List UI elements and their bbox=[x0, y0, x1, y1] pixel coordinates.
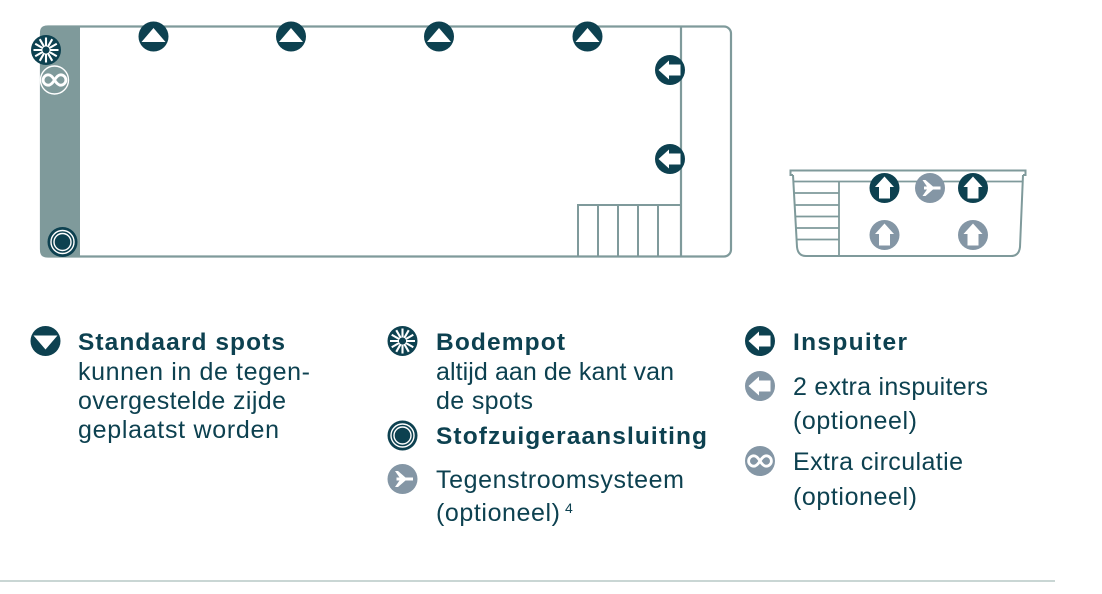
icon: inspuiter bbox=[745, 326, 775, 356]
text: bodempot description: de spots bbox=[436, 387, 533, 415]
right deck divider bbox=[680, 26, 682, 257]
pool cross-section bbox=[790, 170, 1026, 256]
text: extra circulatie: Extra circulatie bbox=[793, 448, 963, 476]
pool top view bbox=[31, 22, 731, 258]
icon: bodempot bbox=[388, 326, 418, 356]
legend: standaard spots bbox=[30, 326, 310, 444]
text: extra circulatie bbox=[793, 448, 963, 511]
text: tegenstroomsysteem: 4 bbox=[565, 500, 573, 516]
text: standaard spots description bbox=[78, 358, 310, 444]
icon: spot 3 bbox=[424, 22, 454, 52]
icon: inspuiter left bbox=[870, 173, 900, 203]
icon: stofzuigeraansluiting bbox=[48, 227, 78, 257]
icon: inspuiter 2 bbox=[655, 144, 685, 174]
text: bodempot description bbox=[436, 358, 674, 415]
icon: extra circulatie bbox=[745, 446, 775, 476]
heading: standaard spots: Standaard spots bbox=[78, 329, 285, 356]
text: bodempot description: altijd aan de kant van bbox=[436, 358, 674, 386]
icon: tegenstroomsysteem bbox=[388, 464, 418, 494]
icon: spot 2 bbox=[276, 22, 306, 52]
icon: extra circulatie bbox=[40, 66, 68, 94]
icon: standaard spot bbox=[30, 326, 60, 356]
icon: extra inspuiter right bbox=[958, 220, 988, 250]
legend: middle column bbox=[388, 326, 707, 527]
text: standaard spots description: geplaatst worden bbox=[78, 416, 279, 444]
basin outline bbox=[793, 175, 1023, 256]
side stairs bbox=[794, 181, 839, 256]
text: extra circulatie: (optioneel) bbox=[793, 483, 917, 511]
text: tegenstroomsysteem bbox=[436, 466, 684, 527]
text: standaard spots description: overgestelde zijde bbox=[78, 387, 286, 415]
heading: bodempot: Bodempot bbox=[436, 329, 565, 356]
icon: inspuiter 1 bbox=[655, 55, 685, 85]
text: extra inspuiters: 2 extra inspuiters bbox=[793, 373, 988, 401]
icon: spot 4 bbox=[572, 22, 602, 52]
icon: bodempot bbox=[31, 35, 61, 65]
icon: extra inspuiter left bbox=[870, 220, 900, 250]
text: tegenstroomsysteem: Tegenstroomsysteem bbox=[436, 466, 684, 494]
icon: extra inspuiter bbox=[745, 371, 775, 401]
text: extra inspuiters bbox=[793, 373, 988, 435]
shaded left band bbox=[40, 26, 80, 258]
heading: stofzuigeraansluiting: Stofzuigeraansluiting bbox=[436, 423, 707, 450]
text: tegenstroomsysteem: (optioneel) bbox=[436, 499, 560, 527]
icon: tegenstroom bbox=[915, 173, 945, 203]
stairs bbox=[578, 205, 681, 257]
heading: inspuiter: Inspuiter bbox=[793, 329, 907, 356]
text: extra inspuiters: (optioneel) bbox=[793, 407, 917, 435]
text: standaard spots description: kunnen in de tegen- bbox=[78, 358, 310, 386]
water line bbox=[793, 180, 1023, 182]
icon: inspuiter right bbox=[958, 173, 988, 203]
legend: right column bbox=[745, 326, 988, 511]
icon: stofzuigeraansluiting bbox=[388, 420, 418, 450]
pool outline bbox=[41, 26, 731, 256]
rim bbox=[790, 170, 1026, 175]
icon: spot 1 bbox=[138, 22, 168, 52]
